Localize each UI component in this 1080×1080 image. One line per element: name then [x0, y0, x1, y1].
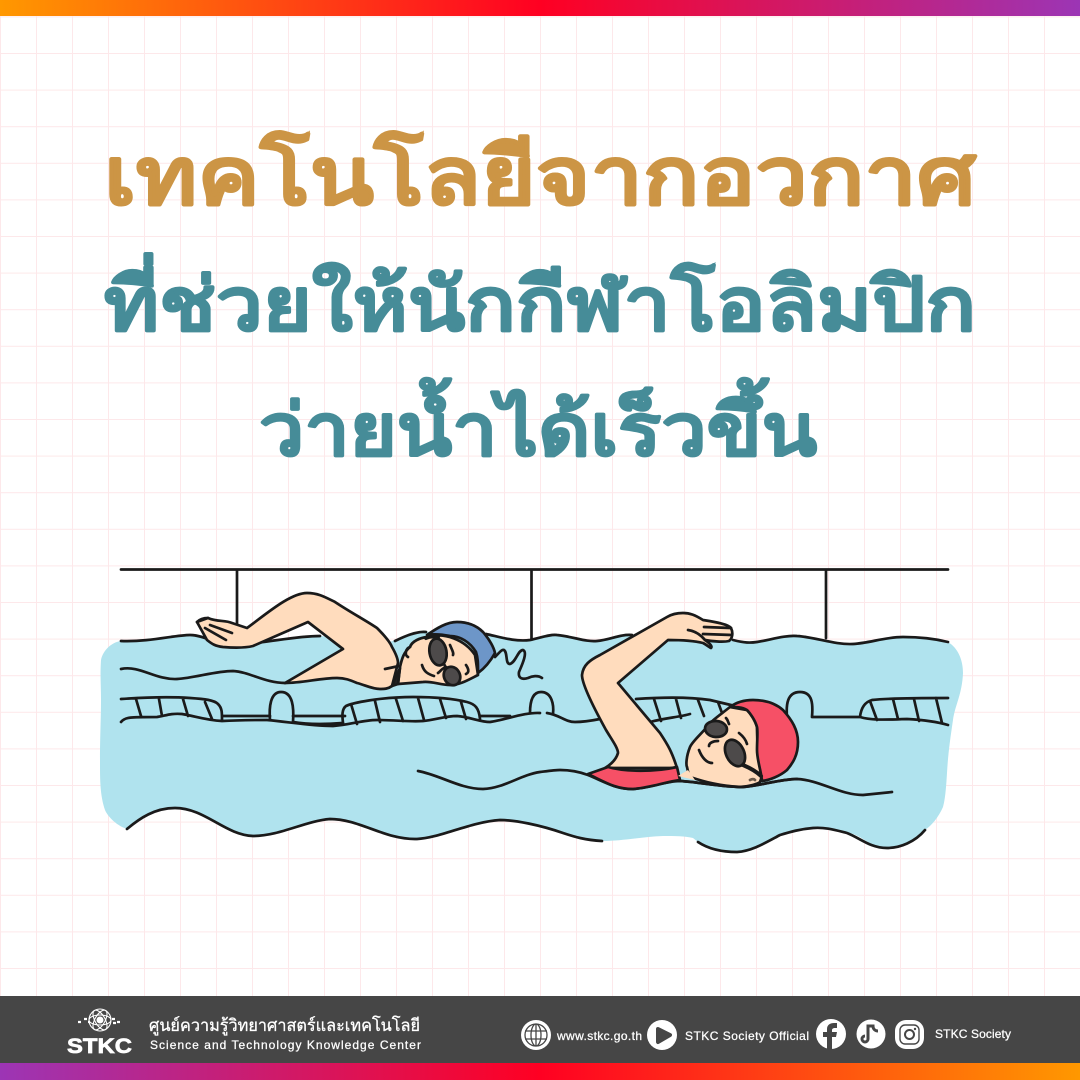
water surface line	[121, 632, 948, 644]
neck strap	[392, 668, 400, 686]
goggles	[704, 720, 728, 738]
icon: globe	[521, 1020, 551, 1050]
logo emblem	[78, 1008, 120, 1032]
goggles	[426, 636, 438, 638]
contacts	[521, 1019, 1011, 1050]
swimmer 1: blue cap	[197, 593, 542, 689]
arm	[582, 613, 732, 768]
title line 2: ที่ช่วยให้นักกีฬาโอลิมปิก	[104, 252, 976, 346]
body and arm	[197, 593, 398, 689]
footer bar	[0, 996, 1080, 1063]
lane ropes	[121, 692, 948, 726]
head	[398, 636, 478, 685]
front water wave over swimmer 2	[680, 779, 797, 787]
bottom gradient bar	[0, 1063, 1080, 1080]
logo: STKC	[67, 1008, 132, 1058]
cap	[730, 700, 798, 781]
youtube name: STKC Society Official	[685, 1029, 809, 1043]
cap	[427, 622, 495, 673]
splash squiggle	[495, 650, 542, 679]
head	[686, 707, 762, 787]
icon: instagram	[895, 1020, 924, 1049]
illustration: swimming pool	[100, 570, 963, 852]
organisation name	[149, 1015, 421, 1052]
name in Thai: ศูนย์ความรู้วิทยาศาสตร์และเทคโนโลยี	[149, 1015, 420, 1036]
title line 1: เทคโนโลยีจากอวกาศ	[104, 129, 977, 221]
icon: facebook	[816, 1019, 846, 1049]
swimmer 2: red cap	[582, 613, 798, 789]
logo wordmark: STKC	[67, 1035, 132, 1058]
water bottom line	[127, 808, 925, 852]
icon: tiktok	[856, 1020, 886, 1048]
wave lines	[121, 668, 892, 795]
name in English: Science and Technology Knowledge Center	[150, 1038, 421, 1052]
instagram name: STKC Society	[935, 1027, 1011, 1041]
top gradient bar	[0, 0, 1080, 16]
title line 3: ว่ายน้ำได้เร็วขึ้น	[259, 377, 817, 471]
website: www.stkc.go.th	[556, 1029, 642, 1043]
water	[100, 630, 963, 852]
title	[104, 129, 977, 471]
icon: play	[647, 1020, 677, 1050]
red swimsuit	[588, 767, 680, 789]
pool rail	[121, 570, 948, 640]
